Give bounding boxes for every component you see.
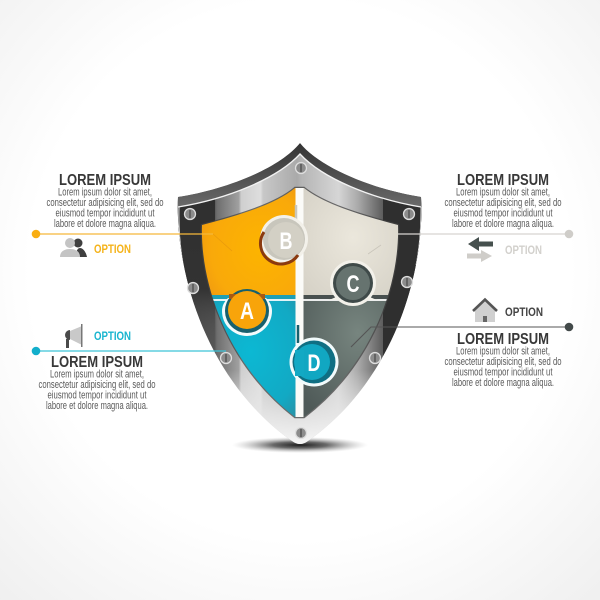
option label: OPTION: [94, 244, 131, 256]
puzzle tab C: C: [346, 271, 360, 298]
body text: labore et dolore magna aliqua.: [54, 218, 156, 230]
body text: Lorem ipsum dolor sit amet,: [456, 186, 550, 198]
connector line: [36, 233, 213, 235]
body text: eiusmod tempor incididunt ut: [48, 390, 146, 402]
icon: megaphone: [65, 324, 82, 348]
puzzle tab B: [260, 205, 308, 264]
heading: LOREM IPSUM: [51, 354, 143, 371]
body text: labore et dolore magna aliqua.: [46, 400, 148, 412]
option label: OPTION: [505, 307, 543, 319]
body text: [444, 186, 562, 230]
shield: [170, 143, 430, 450]
icon: people: [60, 238, 87, 257]
shield shadow: [232, 437, 368, 453]
icon: arrows: [467, 237, 493, 262]
puzzle quadrants: [202, 188, 398, 417]
callout: top left: [32, 172, 213, 257]
quadrant: gray: [304, 296, 388, 417]
quadrant: cream: [304, 188, 398, 295]
connector line: [398, 233, 569, 235]
heading: LOREM IPSUM: [457, 172, 549, 189]
puzzle tab C: [328, 260, 378, 306]
heading: LOREM IPSUM: [59, 172, 151, 189]
option label: OPTION: [505, 245, 542, 257]
body text: consectetur adipisicing elit, sed do: [38, 379, 156, 391]
option label: OPTION: [94, 331, 131, 343]
connector dot: [32, 230, 40, 238]
callout: bottom right: [351, 300, 573, 389]
body text: Lorem ipsum dolor sit amet,: [58, 186, 152, 198]
puzzle tab B: B: [280, 228, 292, 255]
connector dot: [565, 323, 573, 331]
puzzle tab D: D: [308, 350, 320, 377]
body text: labore et dolore magna aliqua.: [452, 377, 554, 389]
puzzle tab A: [222, 289, 272, 336]
connector dot: [32, 347, 40, 355]
connector dot: [565, 230, 573, 238]
callout: bottom left: [32, 324, 226, 412]
body text: [38, 368, 156, 412]
body text: eiusmod tempor incididunt ut: [454, 208, 552, 220]
leader details: [213, 234, 232, 251]
puzzle tab D: [290, 325, 338, 386]
body text: [444, 346, 562, 389]
heading: LOREM IPSUM: [457, 331, 549, 348]
connector line: [36, 350, 226, 352]
body text: labore et dolore magna aliqua.: [452, 218, 554, 230]
quadrant: teal: [212, 295, 296, 417]
body text: eiusmod tempor incididunt ut: [454, 366, 552, 378]
puzzle tab A: A: [240, 298, 254, 325]
body text: eiusmod tempor incididunt ut: [56, 208, 154, 220]
rivets: [184, 162, 414, 438]
metal frame: [178, 143, 421, 444]
body text: Lorem ipsum dolor sit amet,: [456, 346, 550, 358]
callout: top right: [398, 172, 573, 262]
body text: Lorem ipsum dolor sit amet,: [50, 368, 144, 380]
body text: [46, 186, 164, 230]
quadrant: orange: [202, 188, 296, 295]
body text: consectetur adipisicing elit, sed do: [46, 197, 164, 209]
connector line: [351, 327, 569, 347]
inner rim: [202, 188, 398, 417]
icon: house: [473, 300, 497, 322]
